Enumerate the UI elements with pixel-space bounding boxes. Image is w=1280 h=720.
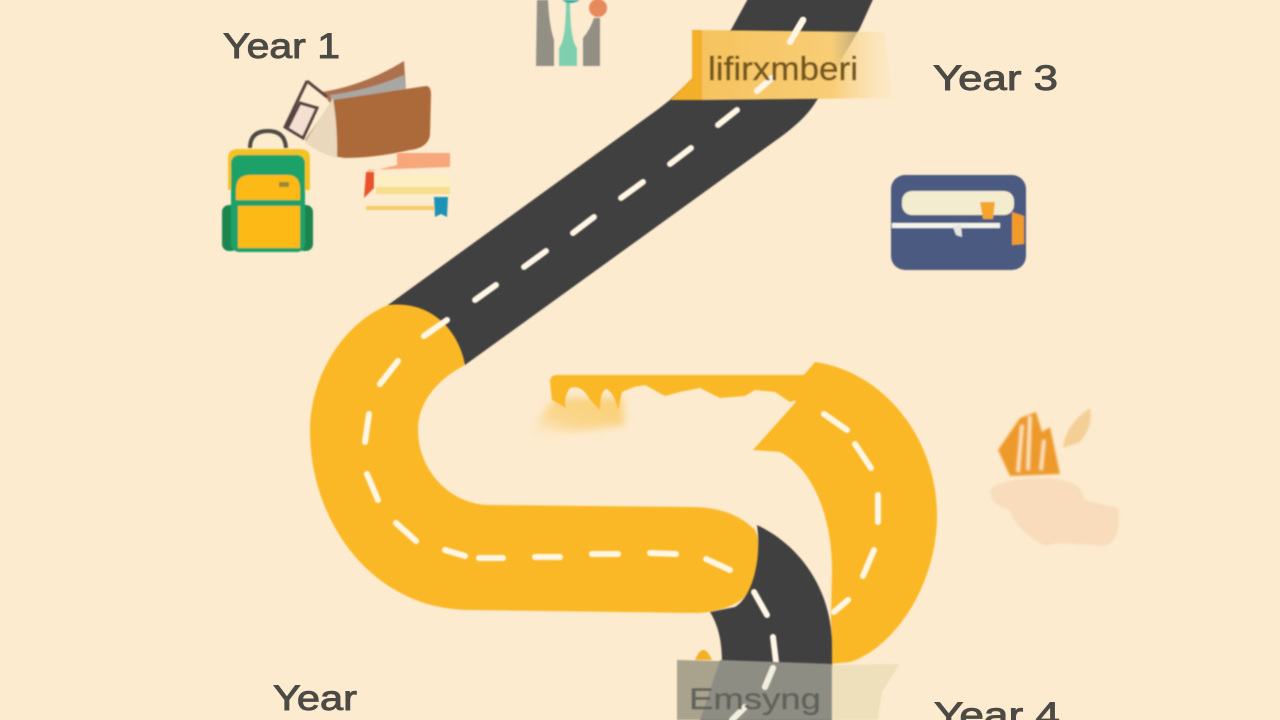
heading: Year 3: Year 3 — [933, 59, 1058, 98]
banner text: lifirxmberi — [708, 50, 858, 87]
banner: top ribbon — [670, 20, 892, 100]
icon: orange shape and hand — [990, 408, 1119, 546]
lane markings — [365, 20, 878, 662]
icon: wallet — [285, 61, 431, 158]
icon: backpack — [222, 131, 313, 252]
road: dark upper section — [388, 0, 875, 365]
heading: Year 2 partial: Year — [273, 679, 357, 718]
road: yellow right curve with arrow head — [753, 362, 937, 664]
icon: blue case — [891, 175, 1026, 270]
heading: Year 1: Year 1 — [223, 27, 340, 66]
scalloped yellow bar by arrow — [525, 375, 810, 438]
icon: stack of books — [364, 153, 450, 217]
road: dark lower section — [700, 525, 832, 720]
banner text: Emsyng — [689, 683, 821, 716]
icon: bottles — [536, 0, 607, 66]
road: yellow left curve — [310, 305, 760, 613]
banner: bottom ribbon — [677, 650, 900, 720]
